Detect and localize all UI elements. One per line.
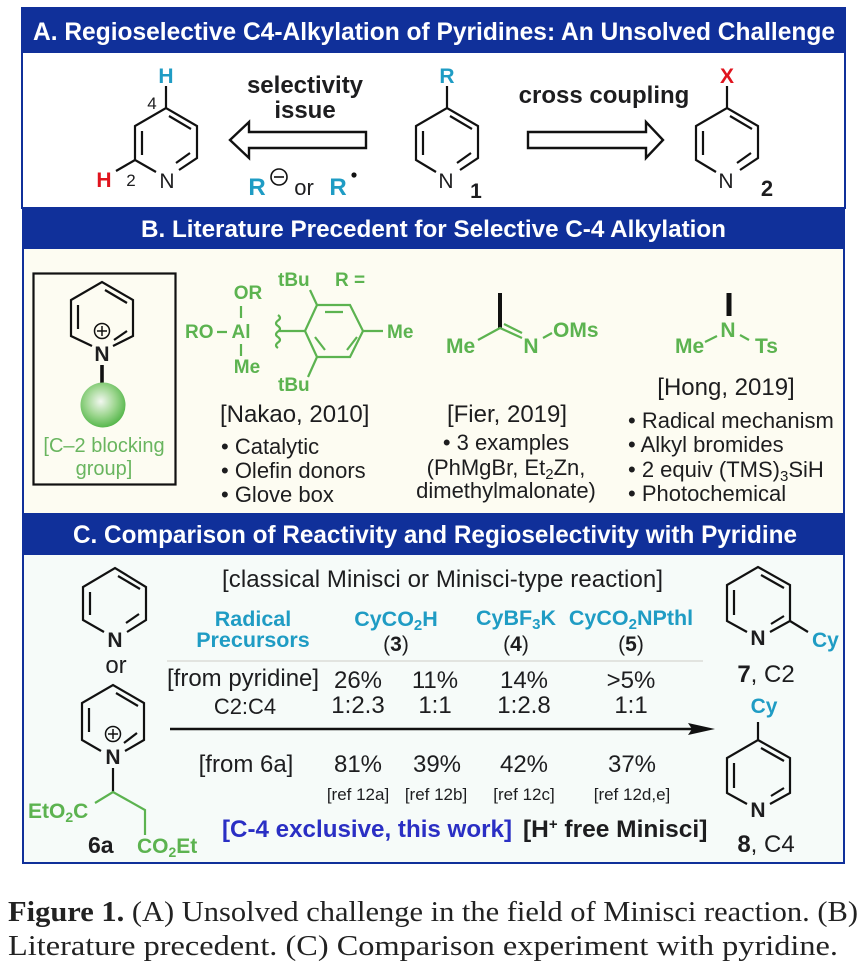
- structure: Nakao aluminum reagent: tBu: [278, 270, 310, 291]
- row: references: [ref 12b]: [405, 785, 467, 804]
- panel B: literature precedent: [22, 207, 845, 514]
- reagents: R anion or R radical: R: [248, 174, 266, 201]
- structure: Nakao aluminum reagent: Me: [234, 357, 260, 378]
- reagents: R anion or R radical: [248, 169, 357, 201]
- header A: [22, 8, 845, 53]
- row: from pyridine: 1:2.8: [497, 692, 551, 719]
- citation and notes: Fier: (PhMgBr, Et: [427, 455, 545, 480]
- structure: 4-R pyridine 1: 1: [470, 180, 482, 203]
- box: C-2 blocking group: [C–2 blocking: [43, 435, 165, 457]
- row: from pyridine: >5%: [607, 667, 655, 694]
- row: from pyridine: [167, 665, 655, 719]
- structure: product 8 C4: Cy: [751, 695, 778, 718]
- column headers: 2: [629, 616, 637, 633]
- row: from pyridine: 14%: [500, 667, 548, 694]
- structure: Hong N-amide: [675, 293, 778, 358]
- row: from pyridine: 11%: [412, 667, 458, 694]
- row: from 6a: 81%: [334, 751, 382, 778]
- structure: 4-X pyridine 2: [696, 65, 773, 201]
- citation and notes: Fier: Zn,: [554, 455, 585, 480]
- citation and notes: Nakao: • Glove box: [221, 482, 334, 507]
- column headers: NPthl: [637, 606, 693, 630]
- panel C: comparison of reactivity: [22, 513, 845, 863]
- row: from pyridine: C2:C4: [214, 694, 276, 719]
- reagents: R anion or R radical: R: [329, 174, 347, 201]
- column headers: CyCO: [354, 607, 414, 631]
- row: from 6a: 39%: [413, 751, 461, 778]
- structure: 4-X pyridine 2: X: [720, 65, 734, 88]
- structure: pyridinium 6a: [28, 685, 197, 860]
- row: references: [327, 785, 670, 804]
- citation and notes: Hong: SiH: [788, 457, 824, 482]
- box: C-2 blocking group: [34, 274, 176, 484]
- column headers: Radical: [215, 607, 291, 631]
- row: references: [ref 12a]: [327, 785, 389, 804]
- column headers: (3): [383, 633, 409, 656]
- structure: 4-R pyridine 1: [416, 65, 482, 203]
- structure: Nakao aluminum reagent: tBu: [278, 375, 310, 396]
- citation and notes: Hong: 3: [780, 468, 788, 485]
- box: C-2 blocking group: N: [94, 343, 110, 366]
- structure: Hong N-amide: Ts: [755, 335, 778, 358]
- subheading: classical Minisci: [classical Minisci or Minisci-type reaction]: [222, 566, 663, 593]
- header C: [22, 513, 845, 554]
- structure: product 7 C2: 7, C2: [737, 661, 795, 688]
- label: selectivity issue: selectivity: [247, 72, 363, 99]
- structure: 4-X pyridine 2: N: [718, 170, 734, 193]
- citation and notes: Nakao: • Catalytic: [221, 434, 319, 459]
- header B: B. Literature Precedent for Selective C-4 Alkylation: [141, 216, 726, 243]
- row: from 6a: 42%: [500, 751, 548, 778]
- row: from 6a: 37%: [608, 751, 656, 778]
- callout: C-4 exclusive, H+ free Minisci: +: [549, 816, 558, 833]
- figure caption: Literature precedent. (C) Comparison experiment with pyridine.: [8, 930, 838, 962]
- column headers: CyCO: [569, 606, 629, 630]
- callout: C-4 exclusive, H+ free Minisci: free Minisci]: [558, 816, 707, 843]
- citation and notes: Fier: [416, 401, 596, 503]
- structure: Nakao aluminum reagent: RO: [185, 322, 214, 343]
- row: references: [ref 12c]: [493, 785, 555, 804]
- structure: Fier oxime: OMs: [553, 319, 599, 342]
- column headers: 2: [414, 617, 422, 634]
- structure: product 8 C4: 8, C4: [737, 831, 795, 858]
- structure: Fier oxime: Me: [446, 335, 475, 358]
- structure: pyridine with H positions: H: [158, 65, 174, 88]
- column headers: K: [540, 606, 556, 630]
- structure: 4-R pyridine 1: N: [438, 170, 454, 193]
- citation and notes: Fier: dimethylmalonate): [416, 478, 596, 503]
- structure: Nakao aluminum reagent: OR: [234, 283, 263, 304]
- structure: pyridine with H positions: 2: [126, 171, 136, 190]
- figure caption: [8, 896, 858, 962]
- header B: [22, 207, 845, 248]
- row: from pyridine: 1:2.3: [331, 692, 385, 719]
- structure: pyridine with H positions: N: [159, 170, 175, 193]
- structure: Nakao aluminum reagent: [185, 270, 413, 396]
- label: or: or: [105, 652, 127, 679]
- callout: C-4 exclusive, H+ free Minisci: [H: [523, 816, 549, 843]
- arrow: cross coupling: [528, 122, 663, 158]
- citation and notes: Nakao: [Nakao, 2010]: [220, 401, 369, 428]
- column headers: CyBF: [476, 606, 532, 630]
- row: from pyridine: 1:1: [614, 692, 648, 719]
- reaction arrow: [170, 723, 715, 735]
- figure caption: Figure 1. (A) Unsolved challenge in the field of Minisci reaction. (B): [8, 896, 858, 928]
- citation and notes: Fier: • 3 examples: [443, 430, 569, 455]
- citation and notes: Hong: • Alkyl bromides: [628, 432, 784, 457]
- citation and notes: Hong: • Radical mechanism: [628, 408, 834, 433]
- citation and notes: Hong: [Hong, 2019]: [657, 374, 795, 401]
- column headers: [196, 606, 693, 656]
- structure: product 8 C4: [727, 695, 795, 858]
- structure: Hong N-amide: N: [720, 319, 736, 342]
- row: from 6a: [from 6a]: [199, 751, 293, 778]
- box: C-2 blocking group: group]: [76, 458, 132, 480]
- callout: C-4 exclusive, H+ free Minisci: [222, 816, 707, 843]
- row: from pyridine: [from pyridine]: [167, 665, 319, 692]
- column headers: Precursors: [196, 628, 310, 652]
- structure: pyridinium 6a: 2: [65, 809, 73, 825]
- structure: Fier oxime: N: [523, 335, 539, 358]
- structure: pyridinium 6a: N: [105, 746, 121, 769]
- column headers: (5): [618, 633, 644, 656]
- structure: Nakao aluminum reagent: R =: [335, 270, 365, 291]
- structure: Fier oxime: [446, 293, 599, 358]
- citation and notes: Hong: • Photochemical: [628, 481, 786, 506]
- structure: pyridinium 6a: C: [73, 800, 88, 823]
- structure: 4-R pyridine 1: R: [439, 65, 455, 88]
- citation and notes: Nakao: • Olefin donors: [221, 458, 366, 483]
- structure: product 7 C2: Cy: [812, 629, 839, 652]
- row: from pyridine: 1:1: [418, 692, 452, 719]
- structure: pyridinium 6a: CO: [137, 835, 168, 858]
- row: references: [ref 12d,e]: [594, 785, 670, 804]
- table: radical precursors: [167, 606, 715, 804]
- structure: Nakao aluminum reagent: Me: [387, 322, 413, 343]
- citation and notes: Fier: [Fier, 2019]: [447, 401, 567, 428]
- structure: pyridinium 6a: Et: [176, 835, 197, 858]
- structure: product 7 C2: [727, 567, 839, 688]
- structure: Hong N-amide: Me: [675, 335, 704, 358]
- structure: pyridine with H positions: H: [96, 169, 112, 192]
- header A: A. Regioselective C4-Alkylation of Pyridines: An Unsolved Challenge: [33, 18, 835, 46]
- callout: C-4 exclusive, H+ free Minisci: [C-4 exclusive, this work]: [222, 816, 512, 843]
- row: from pyridine: 26%: [334, 667, 382, 694]
- citation and notes: Fier: 2: [545, 466, 554, 483]
- structure: pyridine: [83, 568, 146, 652]
- structure: product 8 C4: N: [750, 799, 766, 822]
- reagents: R anion or R radical: or: [294, 175, 314, 200]
- citation and notes: Hong: [628, 374, 834, 506]
- structure: 4-X pyridine 2: 2: [761, 176, 773, 201]
- citation and notes: Hong: • 2 equiv (TMS): [628, 457, 780, 482]
- row: from 6a: [199, 751, 656, 778]
- structure: pyridine with H positions: 4: [147, 94, 157, 113]
- structure: pyridinium 6a: 2: [168, 844, 176, 860]
- structure: pyridine with H positions: [96, 65, 197, 193]
- column headers: 3: [532, 616, 540, 633]
- structure: Nakao aluminum reagent: Al: [232, 322, 250, 343]
- structure: pyridinium 6a: EtO: [28, 800, 65, 823]
- structure: pyridinium 6a: 6a: [88, 832, 114, 858]
- label: selectivity issue: issue: [274, 97, 336, 124]
- panel A: unsolved challenge: [22, 8, 845, 208]
- citation and notes: Nakao: [220, 401, 369, 507]
- label: cross coupling: cross coupling: [519, 82, 689, 109]
- header C: C. Comparison of Reactivity and Regioselectivity with Pyridine: [73, 522, 797, 549]
- structure: product 7 C2: N: [750, 627, 766, 650]
- column headers: H: [422, 607, 438, 631]
- arrow: selectivity issue: [230, 122, 366, 158]
- structure: pyridine: N: [107, 629, 123, 652]
- column headers: (4): [503, 633, 529, 656]
